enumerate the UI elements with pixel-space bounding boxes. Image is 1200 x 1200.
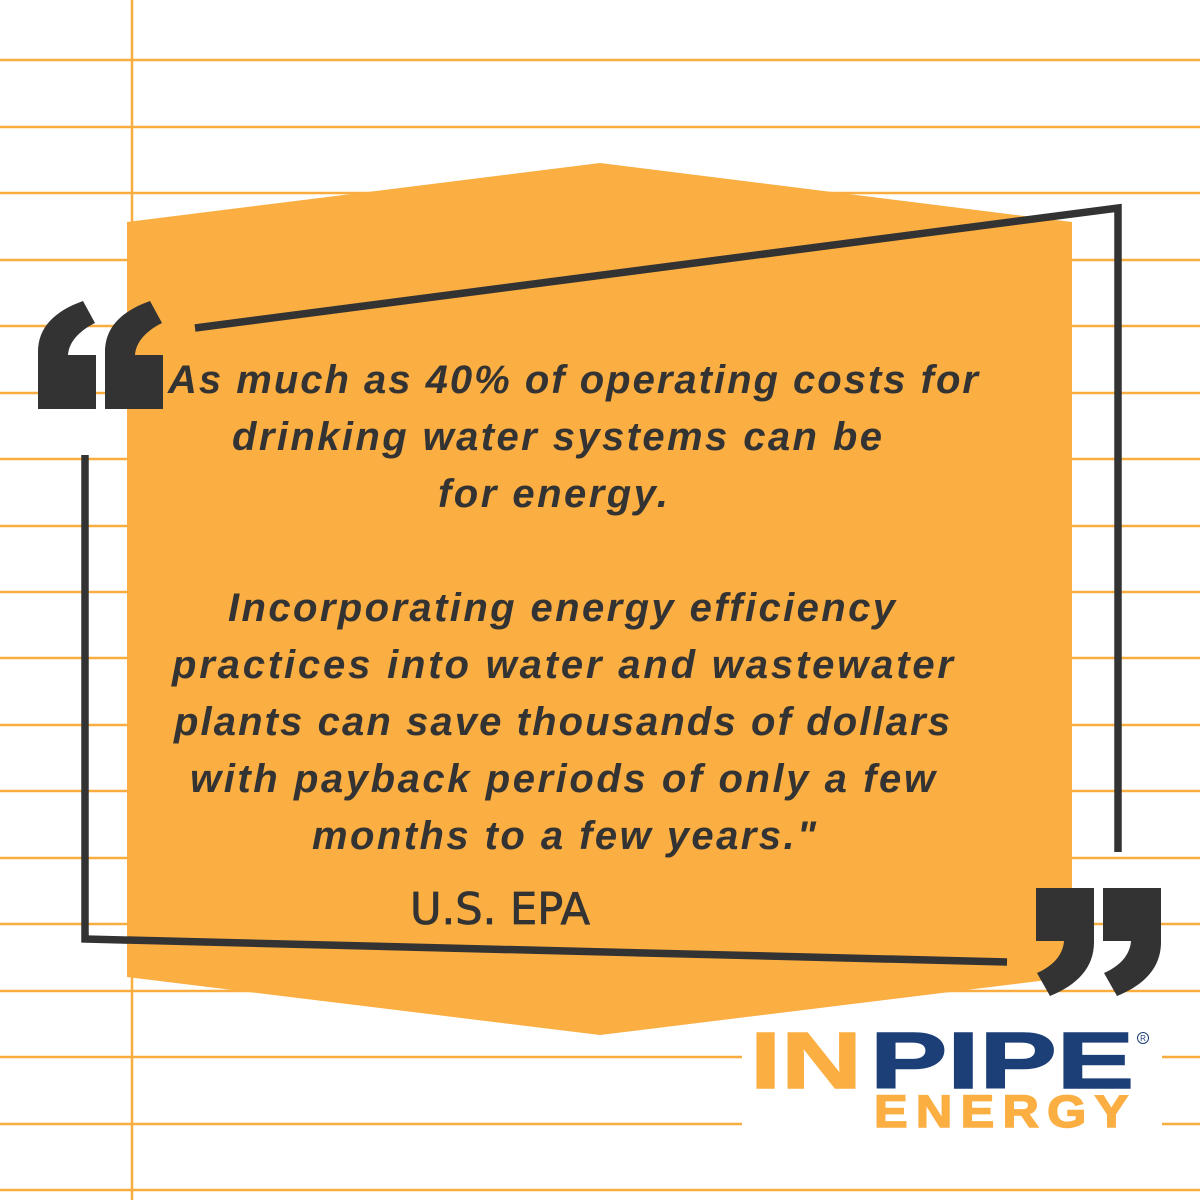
text block: quotation: [167, 358, 980, 858]
panel: orange quote background: [127, 163, 1072, 1035]
logo: Inpipe Energy: ENERGY: [874, 1087, 1128, 1137]
icon: opening quotation mark: [38, 301, 163, 409]
text block: quotation: practices into water and wastewater: [171, 643, 955, 687]
logo: Inpipe Energy: [750, 1016, 1148, 1137]
logo: Inpipe Energy: R: [1140, 1034, 1146, 1043]
text block: quotation: months to a few years.": [312, 814, 817, 858]
text block: quotation: for energy.: [438, 472, 668, 516]
text block: quotation: with payback periods of only a few: [190, 757, 938, 801]
frame line: top right: [195, 208, 1118, 852]
frame line: bottom left: [85, 455, 1007, 962]
text block: quotation: plants can save thousands of dollars: [173, 700, 950, 744]
logo: Inpipe Energy: IN: [750, 1016, 862, 1105]
icon: closing quotation mark: [1036, 888, 1161, 996]
attribution: U.S. EPA: [410, 884, 590, 935]
text block: quotation: Incorporating energy efficiency: [228, 586, 897, 630]
text block: quotation: drinking water systems can be: [232, 415, 882, 459]
text block: quotation: As much as 40% of operating costs for: [167, 358, 980, 402]
logo: Inpipe Energy: PIPE: [870, 1016, 1134, 1105]
